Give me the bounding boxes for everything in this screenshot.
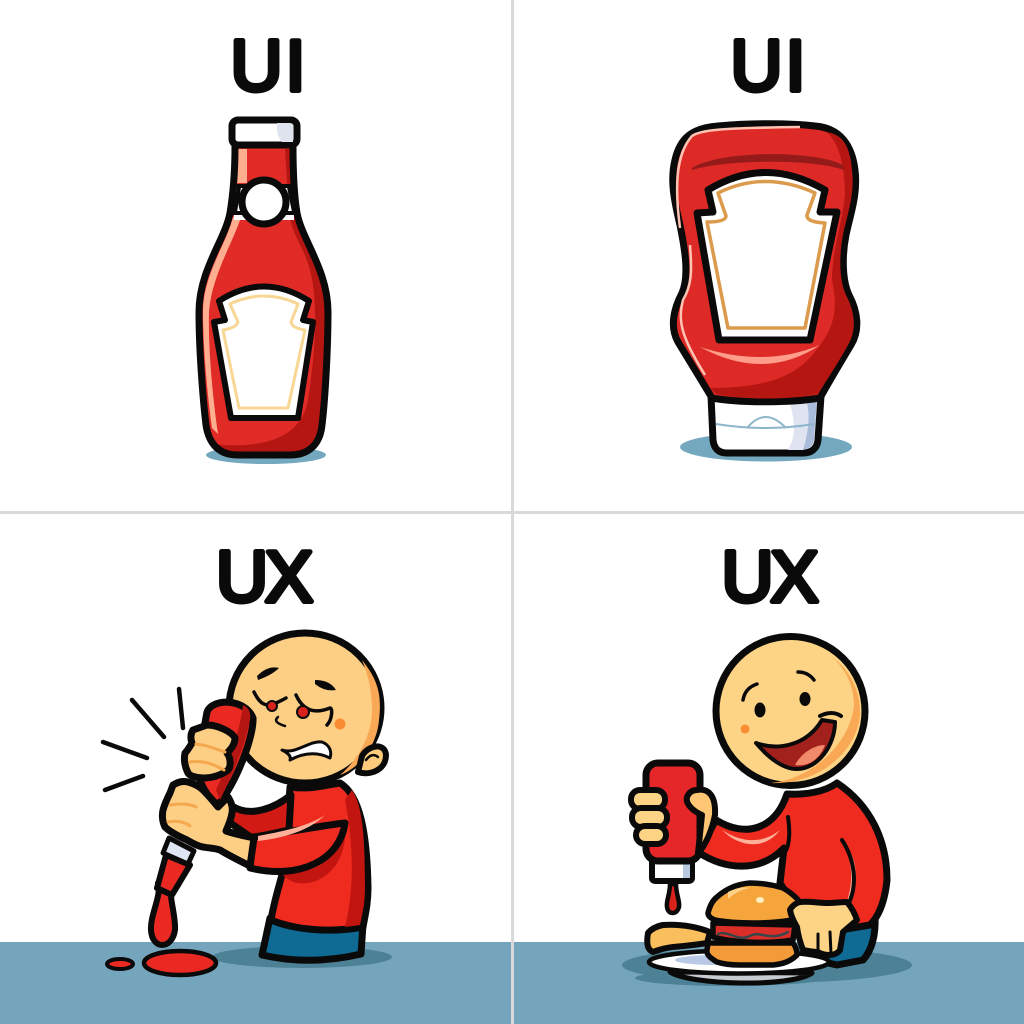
head xyxy=(716,636,865,786)
panel: UI squeeze bottle xyxy=(673,26,857,462)
ear xyxy=(358,746,386,773)
label xyxy=(697,172,837,340)
patty xyxy=(713,923,795,942)
face: worried xyxy=(254,667,346,760)
bottle xyxy=(646,763,700,861)
sleeve xyxy=(250,823,345,871)
nozzle xyxy=(157,855,190,895)
cap xyxy=(652,858,692,881)
illustration: frustrated person xyxy=(103,633,392,975)
panel: UX happy user xyxy=(622,538,912,986)
table surface xyxy=(0,942,1024,1024)
heading: UI left: UI xyxy=(230,26,308,106)
thumb xyxy=(687,790,715,853)
label xyxy=(214,286,313,418)
rear arm xyxy=(226,795,291,838)
heading: UX right: UX xyxy=(721,538,817,618)
panel: UI glass bottle xyxy=(199,26,328,464)
neck band xyxy=(234,184,294,220)
body xyxy=(673,124,857,402)
heading: UI right: UI xyxy=(730,26,808,106)
bottle outline xyxy=(199,146,328,455)
shirt and arm xyxy=(698,783,887,930)
pants xyxy=(815,915,875,965)
right hand on burger xyxy=(790,902,857,955)
icon: glass ketchup bottle xyxy=(199,120,328,464)
fingers xyxy=(631,790,667,844)
head xyxy=(229,633,381,783)
squeezed bottle xyxy=(198,702,253,805)
illustration: happy person xyxy=(622,636,912,986)
lower hand and wrist xyxy=(162,781,254,866)
drop xyxy=(667,884,679,913)
top bun xyxy=(708,883,800,923)
pants xyxy=(262,918,363,960)
shirt body xyxy=(271,783,368,930)
cap xyxy=(232,120,297,145)
plate xyxy=(649,950,829,983)
upper hand xyxy=(184,725,235,778)
face: smiling xyxy=(740,672,841,769)
left hand on table xyxy=(647,925,710,952)
cap xyxy=(711,396,821,453)
bottom bun xyxy=(707,943,797,965)
icon: squeeze ketchup bottle xyxy=(673,124,857,462)
shout lines xyxy=(103,689,183,790)
ketchup drip xyxy=(151,883,175,945)
puddles xyxy=(144,951,216,975)
heading: UX left: UX xyxy=(216,538,312,618)
panel: UX frustrated user xyxy=(103,538,392,975)
burger xyxy=(707,883,800,965)
